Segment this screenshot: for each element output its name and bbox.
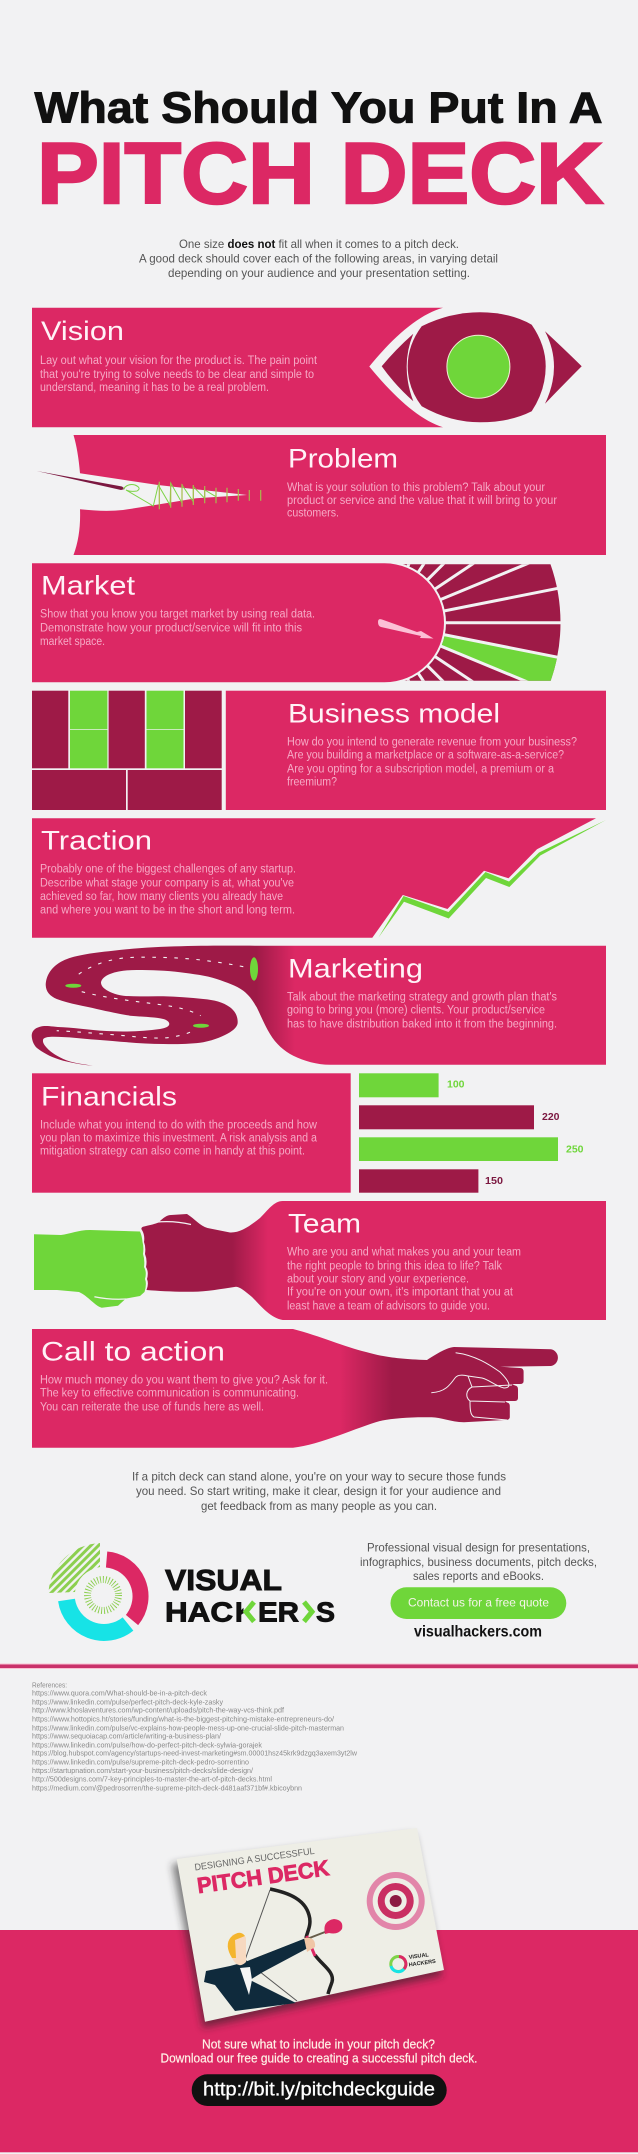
- logo wordmark: [165, 1565, 335, 1628]
- closing text: get feedback from as many people as you can.: [201, 1499, 437, 1513]
- body text: problem: What is your solution to this problem? Talk about your: [287, 482, 545, 494]
- intro text: One size does not fit all when it comes to a pitch deck.: [179, 237, 459, 251]
- guide cover: [172, 1828, 444, 2028]
- call to download: [160, 2036, 478, 2066]
- heading: marketing: Marketing: [288, 953, 423, 983]
- body text: team: the right people to bring this idea to life? Talk: [287, 1261, 502, 1273]
- references: https://medium.com/@pedrosorren/the-supreme-pitch-deck-d481aaf371bf#.kbicoybnn: [32, 1785, 302, 1792]
- heading: traction: Traction: [41, 825, 152, 855]
- title: [34, 83, 603, 222]
- icon: target: [367, 1872, 425, 1930]
- logo wordmark: VISUAL: [165, 1565, 282, 1597]
- references: https://www.linkedin.com/pulse/vc-explains-how-people-mess-up-one-crucial-slide-pitch-masterman: [32, 1725, 344, 1732]
- body text: vision: understand, meaning it has to be a real problem.: [40, 382, 269, 394]
- body text: team: Who are you and what makes you and your team: [287, 1247, 521, 1259]
- panel: team: [34, 1201, 606, 1320]
- body text: business model: freemium?: [287, 777, 337, 789]
- arm and fist shape: [141, 1201, 606, 1320]
- body text: marketing: [287, 992, 557, 1030]
- footer band: [0, 1930, 638, 2152]
- references: References:: [32, 1683, 67, 1690]
- panel: financials: [32, 1073, 351, 1193]
- references: https://www.linkedin.com/pulse/perfect-pitch-deck-kyle-zasky: [32, 1699, 224, 1706]
- references: http://500designs.com/7-key-principles-to-master-the-art-of-pitch-decks.html: [32, 1776, 272, 1783]
- bar chart: financials: 250: [566, 1144, 584, 1155]
- call to download: Download our free guide to creating a successful pitch deck.: [160, 2051, 478, 2066]
- cover logo: [391, 1952, 437, 1972]
- body text: business model: Are you building a marketplace or a software-as-a-service?: [287, 750, 564, 762]
- body text: problem: [287, 482, 557, 520]
- icon: needle and thread: [37, 471, 261, 509]
- body text: financials: you plan to maximize this investment. A risk analysis and a: [40, 1133, 318, 1145]
- body text: financials: [40, 1120, 318, 1158]
- pointing hand shape: [32, 1329, 558, 1448]
- body text: market: [40, 609, 315, 648]
- cover page: [177, 1828, 444, 2022]
- bar chart: financials: [359, 1073, 584, 1193]
- closing text: [132, 1470, 506, 1513]
- body text: market: Demonstrate how your product/service will fit into this: [40, 623, 302, 635]
- heading: call to action: Call to action: [41, 1336, 225, 1366]
- panel: vision: [32, 308, 582, 427]
- illustration: archer: [204, 1889, 342, 2011]
- body text: team: least have a team of advisors to guide you.: [287, 1300, 490, 1312]
- intro text: depending on your audience and your presentation setting.: [168, 266, 470, 280]
- body text: problem: product or service and the value that it will bring to your: [287, 495, 557, 507]
- logo: visual hackers: [48, 1543, 335, 1632]
- body text: call to action: You can reiterate the use of funds here as well.: [40, 1402, 264, 1414]
- closing text: If a pitch deck can stand alone, you're on your way to secure those funds: [132, 1470, 506, 1484]
- body text: vision: [40, 355, 318, 394]
- logo mark: [48, 1543, 141, 1632]
- title: What Should You Put In A: [34, 83, 602, 132]
- cover title: DESIGNING A SUCCESSFUL: [194, 1846, 315, 1873]
- icon: gauge pointer: [378, 619, 434, 638]
- body text: marketing: going to bring you (more) clients. Your product/service: [287, 1005, 545, 1017]
- body text: team: about your story and your experience.: [287, 1274, 469, 1286]
- body text: team: If you're on your own, it's important that you at: [287, 1287, 514, 1299]
- icon: winding road: [32, 946, 606, 1066]
- panel: traction: [32, 818, 606, 938]
- website: visualhackers.com: [414, 1624, 542, 1641]
- cover logo: VISUAL: [408, 1952, 430, 1961]
- panel: marketing: [32, 946, 606, 1066]
- call to download: Not sure what to include in your pitch deck?: [202, 2036, 435, 2051]
- logo wordmark: ER: [258, 1597, 299, 1628]
- body text: market: Show that you know you target market by using real data.: [40, 609, 315, 621]
- references: https://blog.hubspot.com/agency/startups-need-invest-marketing#sm.00001hsz45krk9dzgq3axem3yt2lw: [32, 1751, 358, 1758]
- logo wordmark: S: [316, 1597, 335, 1628]
- body text: marketing: Talk about the marketing strategy and growth plan that's: [287, 992, 557, 1004]
- body text: traction: Probably one of the biggest challenges of any startup.: [40, 864, 296, 876]
- body text: marketing: has to have distribution baked into it from the beginning.: [287, 1018, 557, 1030]
- body text: vision: Lay out what your vision for the product is. The pain point: [40, 355, 318, 367]
- chart: market gauge: [402, 564, 560, 681]
- panel: problem: [37, 435, 606, 555]
- title: PITCH DECK: [37, 126, 603, 222]
- heading: financials: Financials: [41, 1081, 177, 1111]
- logo wordmark: HAC: [165, 1597, 233, 1628]
- service description: [360, 1541, 597, 1583]
- body text: call to action: The key to effective communication is communicating.: [40, 1388, 299, 1400]
- chart: business model canvas grid: [32, 691, 222, 810]
- panel: business model: [32, 691, 606, 810]
- bar chart: financials: 220: [542, 1112, 560, 1123]
- references: https://www.hottopics.ht/stories/funding/what-is-the-biggest-pitching-mistake-entrepreneurs-do/: [32, 1717, 334, 1724]
- intro text: [139, 237, 498, 280]
- body text: call to action: How much money do you want them to give you? Ask for it.: [40, 1375, 328, 1387]
- body text: financials: Include what you intend to do with the proceeds and how: [40, 1120, 318, 1132]
- service description: sales reports and eBooks.: [413, 1569, 544, 1583]
- cover title: PITCH DECK: [196, 1855, 331, 1898]
- contact block: [360, 1541, 597, 1641]
- body text: traction: Describe what stage your company is at, what you've: [40, 878, 294, 890]
- body text: business model: Are you opting for a subscription model, a premium or a: [287, 764, 555, 776]
- references: https://www.sequoiacap.com/article/writing-a-business-plan/: [32, 1734, 221, 1741]
- references: https://www.linkedin.com/pulse/how-do-perfect-pitch-deck-sylwia-gorajek: [32, 1742, 263, 1749]
- intro text: A good deck should cover each of the following areas, in varying detail: [139, 252, 498, 266]
- button: contact: Contact us for a free quote: [408, 1596, 549, 1610]
- cover logo: HACKERS: [408, 1959, 437, 1968]
- panel: call to action: [32, 1329, 558, 1448]
- body text: call to action: [40, 1375, 328, 1414]
- chart: growth line: [378, 820, 606, 938]
- body text: traction: [40, 864, 296, 917]
- heading: business model: Business model: [288, 698, 500, 728]
- body text: traction: and where you want to be in the short and long term.: [40, 905, 295, 917]
- body text: business model: [287, 737, 577, 789]
- body text: problem: customers.: [287, 508, 339, 520]
- body text: financials: mitigation strategy can also come in handy at this point.: [40, 1146, 305, 1158]
- heading: vision: Vision: [41, 316, 124, 346]
- body text: business model: How do you intend to generate revenue from your business?: [287, 737, 577, 749]
- references: https://www.quora.com/What-should-be-in-a-pitch-deck: [32, 1691, 208, 1698]
- references: https://www.linkedin.com/pulse/supreme-pitch-deck-pedro-sorrentino: [32, 1759, 249, 1766]
- references: https://startupnation.com/start-your-business/pitch-decks/slide-design/: [32, 1768, 253, 1775]
- body text: traction: achieved so far, how many clients you already have: [40, 891, 283, 903]
- service description: infographics, business documents, pitch decks,: [360, 1555, 597, 1569]
- heading: team: Team: [288, 1208, 361, 1238]
- references: [32, 1683, 358, 1792]
- link pill: http://bit.ly/pitchdeckguide: [203, 2080, 435, 2101]
- heading: market: Market: [41, 570, 136, 600]
- service description: Professional visual design for presentations,: [367, 1541, 590, 1555]
- logo wordmark: K: [235, 1597, 255, 1628]
- icon: green fist: [34, 1230, 146, 1308]
- references: http://www.khoslaventures.com/wp-content/uploads/pitch-the-way-vcs-think.pdf: [32, 1708, 284, 1715]
- closing text: you need. So start writing, make it clear, design it for your audience and: [136, 1484, 501, 1498]
- icon: eye: [382, 312, 582, 422]
- bar chart: financials: 150: [485, 1176, 503, 1187]
- heading: problem: Problem: [288, 444, 398, 474]
- bar chart: financials: 100: [447, 1080, 465, 1091]
- link pill: [192, 2074, 447, 2106]
- body text: market: market space.: [40, 636, 105, 648]
- panel: market: [32, 563, 560, 682]
- body text: team: [287, 1247, 521, 1312]
- body text: vision: that you're trying to solve needs to be clear and simple to: [40, 369, 314, 381]
- button: contact: [390, 1587, 566, 1619]
